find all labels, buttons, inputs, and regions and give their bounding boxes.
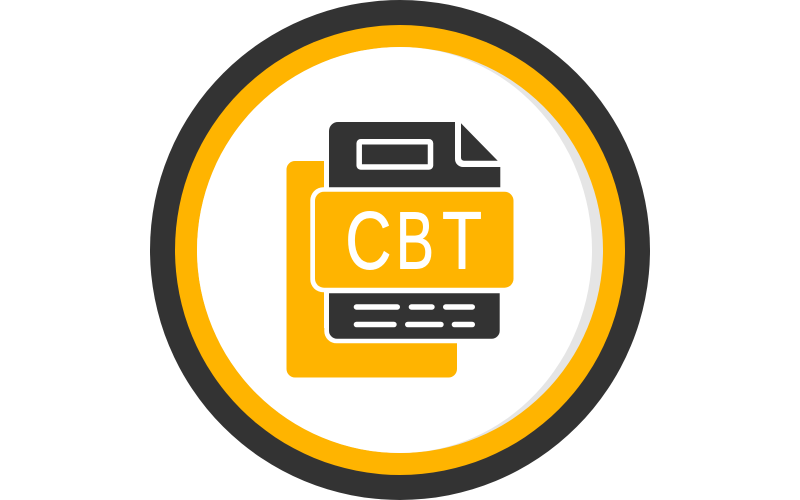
document bottom dark section outline — [324, 285, 500, 343]
description lines — [354, 304, 475, 327]
document folded corner — [461, 123, 498, 161]
icon: CBT file — [286, 122, 517, 378]
label: CBT: B — [396, 194, 434, 286]
banner — [315, 192, 514, 288]
label: CBT: T — [442, 195, 482, 286]
label: CBT — [345, 194, 482, 286]
label: CBT: C — [345, 194, 391, 286]
banner outline — [310, 187, 517, 292]
document bottom dark section — [329, 293, 500, 339]
document top dark section — [329, 122, 500, 188]
document label window — [359, 142, 430, 167]
back orange page — [286, 161, 457, 378]
badge: concentric circles — [150, 0, 650, 500]
